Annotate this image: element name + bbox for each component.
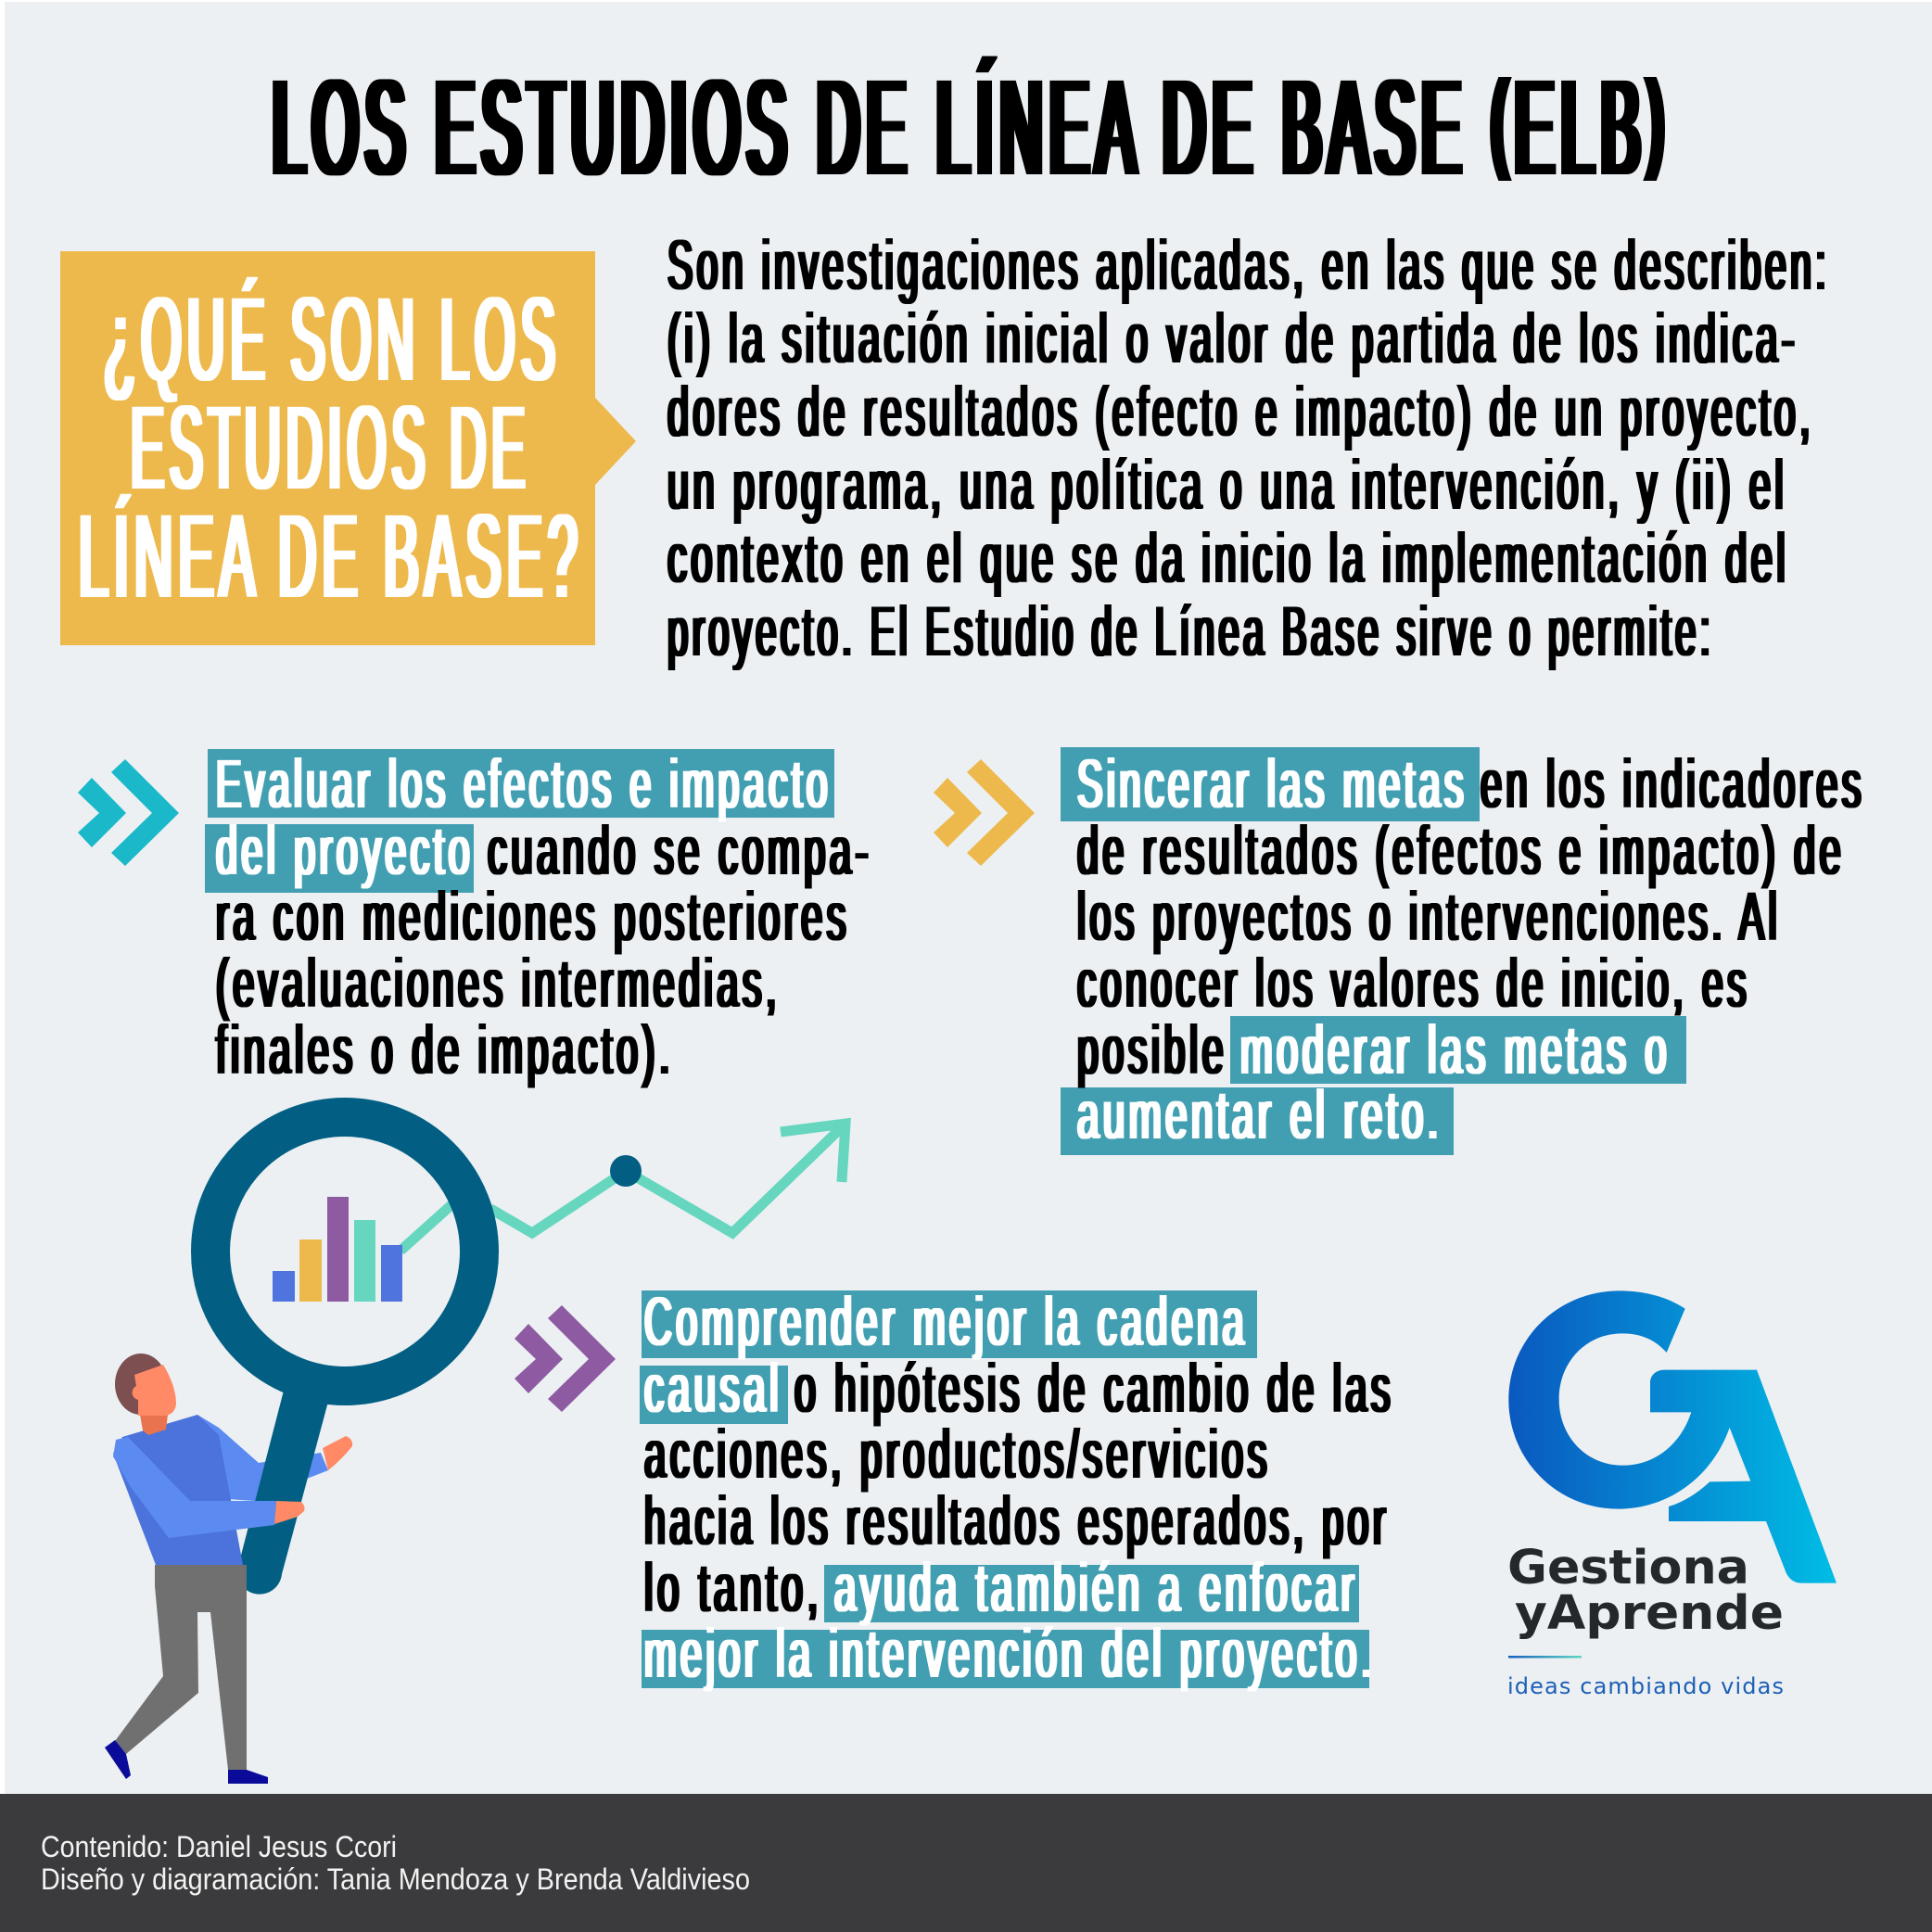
chart marker dot [610,1155,642,1187]
text block: definition [667,226,1830,671]
evaluate text: cuando se compa- [488,812,872,889]
icon: person back arm [197,1415,352,1501]
highlight bars [640,1290,1369,1688]
icon: person [105,1354,305,1784]
logo tagline: ideas cambiando vidas [1507,1673,1784,1699]
evaluate text: Evaluar los efectos e impacto [216,745,832,822]
logo wordmark [1507,1541,1784,1641]
text: ) [1647,57,1671,182]
panel: causal chain [640,1283,1394,1692]
chart: rising line with arrow [400,1124,845,1251]
targets text: aumentar el reto. [1077,1076,1443,1153]
person front hand [274,1501,305,1524]
causal text: causal [644,1350,782,1427]
person front arm [113,1437,276,1538]
logo: Gestiona y Aprende [1507,1290,1837,1699]
highlight bars [1061,747,1686,1155]
icon: purple double chevron [515,1305,616,1412]
person neck [140,1415,168,1435]
panel: question callout box: ¿QUÉ SON LOS [104,273,561,406]
person torso [113,1415,243,1565]
evaluate text: (evaluaciones intermedias, [216,945,781,1022]
person hair [115,1354,167,1415]
title: ELB [1515,52,1647,204]
person shoes [105,1740,268,1784]
logo wordmark: Gestiona [1507,1541,1749,1595]
footer credits: Contenido: Daniel Jesus Ccori [41,1830,397,1863]
title: ( [1492,57,1515,182]
logo wordmark: yAprende [1515,1586,1784,1641]
callout heading [79,273,583,623]
person legs [115,1565,247,1770]
highlight bars [205,749,834,893]
chart: bars in lens [273,1197,402,1302]
targets text: Sincerar las metas [1077,745,1468,822]
causal text: o hipótesis de cambio de las [794,1350,1394,1427]
footer band [0,1794,1932,1932]
icon: teal double chevron [78,759,179,866]
causal text [644,1283,1394,1692]
panel: question callout box [60,251,636,645]
callout shape [60,251,636,645]
footer credits [41,1830,750,1896]
panel: adjust targets [1061,745,1865,1155]
text: LÍNEA DE BASE? [79,490,583,623]
causal text: lo tanto, [644,1549,822,1626]
causal text: Comprender mejor la cadena [644,1283,1248,1360]
evaluate text: finales o de impacto). [216,1011,674,1088]
causal text: ayuda también a enfocar [834,1549,1358,1626]
causal text: mejor la intervención del proyecto. [644,1615,1376,1692]
causal text: acciones, productos/servicios [644,1416,1271,1493]
icon: yellow double chevron [934,759,1035,866]
icon: magnifying glass [210,1117,479,1595]
person face [133,1365,176,1416]
panel: question callout box: ESTUDIOS DE [131,382,530,515]
evaluate text [216,745,872,1088]
targets text: posible [1077,1011,1227,1088]
footer credits: Diseño y diagramación: Tania Mendoza y Brenda Valdivieso [41,1862,750,1896]
evaluate text: ra con mediciones posteriores [216,878,850,955]
logo mark [1508,1290,1837,1583]
targets text [1077,745,1865,1153]
evaluate text: del proyecto [216,812,474,889]
panel: evaluate effects [205,745,872,1088]
